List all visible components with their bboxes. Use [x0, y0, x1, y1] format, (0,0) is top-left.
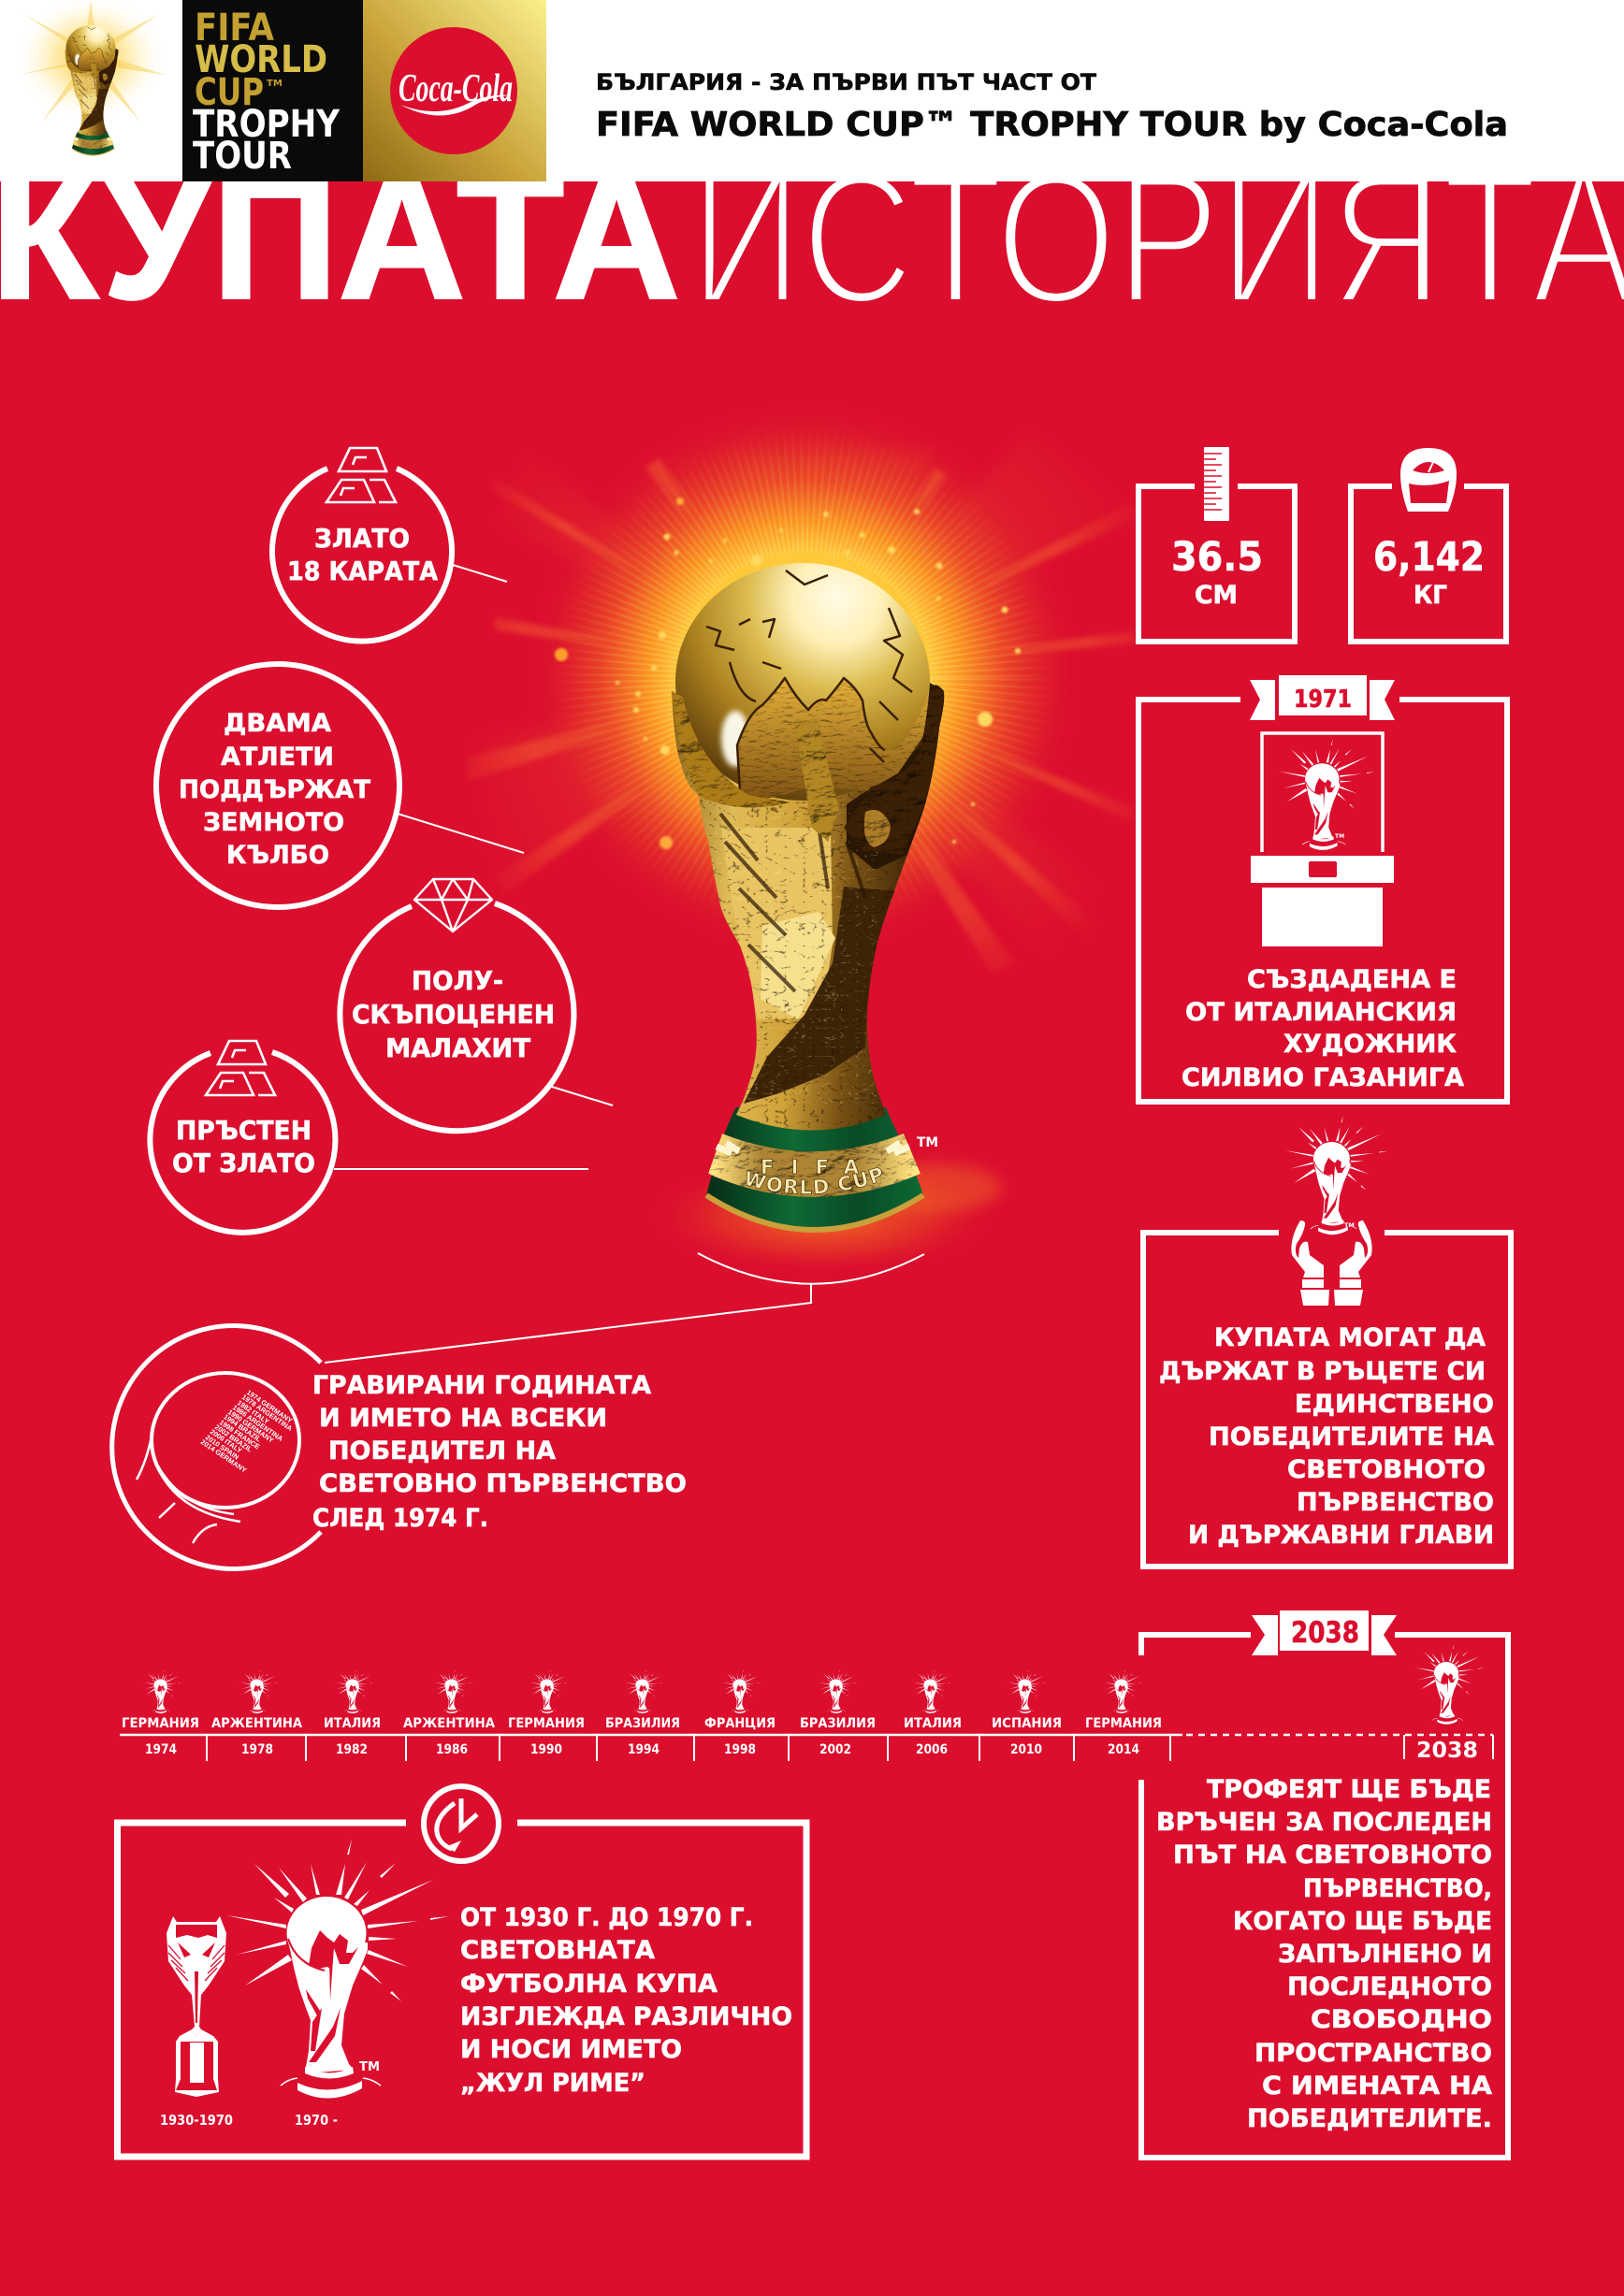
timeline years: 1974: [145, 1742, 177, 1757]
label: last presentation: ЗАПЪЛНЕНО И: [1278, 1940, 1492, 1969]
panel: 2038: [1141, 1610, 1508, 2158]
engraved winners list: 1978 ARGENTINA: [240, 1393, 295, 1433]
label: two athletes: ЗЕМНОТО: [203, 808, 344, 837]
timeline winners: ИТАЛИЯ: [324, 1716, 381, 1731]
header band: [0, 0, 1624, 181]
logo: Coca-Cola: Coca-Cola: [399, 67, 513, 110]
label: malachite: [352, 965, 555, 1063]
engraved winners list: 1974 GERMANY: [245, 1388, 294, 1425]
weight unit: КГ: [1414, 581, 1447, 610]
engraved winners list: 1982 ITALY: [236, 1398, 270, 1426]
label: two athletes: АТЛЕТИ: [221, 743, 334, 772]
logo: FIFA World Cup Trophy Tour: TM: [267, 79, 283, 89]
timeline winners: ГЕРМАНИЯ: [508, 1716, 585, 1731]
engraved winners list: 1990 GERMANY: [226, 1408, 275, 1445]
logo: FIFA World Cup Trophy Tour: CUP: [195, 71, 264, 114]
panel: 1971 creator: [1138, 675, 1507, 1102]
engraved winners list: 1998 FRANCE: [218, 1418, 261, 1451]
main title: [1, 181, 1624, 301]
label: gold 18 carat: ЗЛАТО: [314, 523, 410, 554]
icon: trophy in hands: TM: [1344, 1221, 1355, 1229]
trademark: TM: [359, 2060, 380, 2074]
label: last presentation: ПОБЕДИТЕЛИТЕ.: [1247, 2104, 1492, 2133]
engraved winners list: 2014 GERMANY: [199, 1437, 248, 1475]
label: creator: СЪЗДАДЕНА Е: [1247, 965, 1457, 994]
engraved winners list: 1994 BRAZIL: [222, 1412, 263, 1444]
label: engraved text: И ИМЕТО НА ВСЕКИ: [319, 1404, 607, 1433]
timeline winners: ГЕРМАНИЯ: [122, 1716, 199, 1731]
timeline years: 2014: [1108, 1742, 1139, 1757]
trophy base inscription: WORLD CUP: [747, 1167, 882, 1194]
engraved winners list: 2006 ITALY: [209, 1427, 243, 1455]
timeline axis: [120, 1735, 1493, 1761]
height value: 36.5: [1171, 534, 1263, 581]
trophy base inscription: FIFA: [761, 1156, 860, 1178]
trademark: TM: [917, 1135, 938, 1150]
icon: diamond: [414, 879, 492, 931]
label: engraved text: ГРАВИРАНИ ГОДИНАТА: [312, 1371, 651, 1400]
timeline years: 1994: [628, 1742, 660, 1757]
label: 1930-1970: 1930-1970: [160, 2112, 233, 2129]
timeline: [120, 1644, 1493, 1763]
callout: gold ring: [150, 1041, 588, 1233]
banner: 1971: [1250, 675, 1395, 720]
timeline winners: [122, 1716, 1162, 1731]
callout: engraved winners: [112, 1253, 924, 1569]
header title: FIFA WORLD CUP™ TROPHY TOUR by Coca-Cola: [596, 106, 1508, 144]
label: gold 18 carat: 18 КАРАТА: [287, 556, 438, 586]
timeline years: 2002: [819, 1742, 851, 1757]
label: gold ring: ПРЪСТЕН: [176, 1115, 312, 1146]
icon: base close-up: [112, 1326, 321, 1569]
label: who can hold: И ДЪРЖАВНИ ГЛАВИ: [1188, 1521, 1494, 1550]
engraved winners list: 2002 BRAZIL: [213, 1422, 254, 1454]
label: who can hold: ДЪРЖАТ В РЪЦЕТЕ СИ: [1159, 1357, 1486, 1386]
engraved winners list: 2010 SPAIN: [204, 1433, 240, 1462]
height unit: СМ: [1195, 581, 1238, 610]
timeline winners: БРАЗИЛИЯ: [800, 1716, 876, 1731]
timeline years: 2038: [1416, 1739, 1478, 1763]
timeline winners: ИТАЛИЯ: [904, 1716, 962, 1731]
label: last presentation: КОГАТО ЩЕ БЪДЕ: [1233, 1907, 1492, 1936]
icon: ruler: [1204, 447, 1229, 521]
label: Jules Rimet text: СВЕТОВНАТА: [460, 1936, 655, 1965]
icon: gold bars: [206, 1041, 275, 1095]
timeline winners: АРЖЕНТИНА: [403, 1716, 495, 1731]
label: Jules Rimet text: ОТ 1930 Г. ДО 1970 Г.: [460, 1903, 753, 1932]
label: engraved text: СВЕТОВНО ПЪРВЕНСТВО: [319, 1469, 687, 1498]
label: two athletes: [179, 709, 371, 870]
header subtitle: БЪЛГАРИЯ - ЗА ПЪРВИ ПЪТ ЧАСТ ОТ: [596, 69, 1097, 95]
label: engraved text: [312, 1371, 687, 1533]
label: who can hold: СВЕТОВНОТО: [1287, 1455, 1486, 1484]
timeline winners: ГЕРМАНИЯ: [1085, 1716, 1162, 1731]
timeline winners: ИСПАНИЯ: [992, 1716, 1062, 1731]
label: last presentation: С ИМЕНАТА НА: [1262, 2072, 1492, 2101]
label: Jules Rimet text: [460, 1903, 792, 2098]
timeline winners: БРАЗИЛИЯ: [605, 1716, 680, 1731]
banner: 2038: [1252, 1610, 1397, 1655]
logo: FIFA World Cup Trophy Tour: FIFA: [195, 7, 274, 50]
main title: КУПАТА: [0, 138, 680, 337]
icon: trophy in display case: [1251, 733, 1394, 946]
label: malachite: СКЪПОЦЕНЕН: [352, 999, 555, 1030]
icon: clock: [424, 1786, 499, 1861]
label: last presentation: СВОБОДНО: [1311, 2005, 1492, 2034]
panel: height: [1138, 447, 1295, 642]
label: who can hold: ПЪРВЕНСТВО: [1297, 1488, 1494, 1517]
icon: small trophy with glow: [14, 0, 167, 155]
icon: gold bars: [326, 448, 396, 502]
icon: trophy in hands: [1285, 1116, 1388, 1306]
label: engraved text: СЛЕД 1974 Г.: [312, 1504, 488, 1533]
timeline years: 1978: [241, 1742, 273, 1757]
timeline years: 1998: [724, 1742, 756, 1757]
panel: Jules Rimet: [118, 1786, 806, 2157]
icon: modern trophy: [226, 1840, 449, 2099]
panel: who can hold: [1143, 1116, 1511, 1567]
label: creator: ОТ ИТАЛИАНСКИЯ: [1185, 998, 1457, 1027]
label: gold 18 carat: [287, 523, 438, 586]
timeline trophies: [143, 1644, 1485, 1725]
engraved winners list: [199, 1388, 295, 1475]
logo: FIFA World Cup Trophy Tour: WORLD: [195, 38, 327, 81]
label: who can hold: КУПАТА МОГАТ ДА: [1214, 1323, 1486, 1352]
logo: Coca-Cola: [363, 0, 546, 181]
gold trophy: [655, 563, 954, 1230]
callout: gold 18 carat: [272, 448, 507, 642]
label: last presentation: ВРЪЧЕН ЗА ПОСЛЕДЕН: [1156, 1808, 1492, 1837]
label: gold ring: ОТ ЗЛАТО: [172, 1148, 315, 1178]
label: two athletes: ПОДДЪРЖАТ: [179, 775, 371, 804]
timeline years: 1986: [436, 1742, 468, 1757]
icon: scale: [1400, 448, 1457, 512]
label: 1970: 1970 -: [295, 2112, 338, 2129]
label: two athletes: КЪЛБО: [226, 841, 329, 870]
label: last presentation: ТРОФЕЯТ ЩЕ БЪДЕ: [1207, 1775, 1491, 1804]
trophy glow and rays: [468, 397, 1139, 1277]
label: creator: ХУДОЖНИК: [1283, 1030, 1457, 1059]
icon: Jules Rimet cup: [167, 1916, 226, 2097]
label: malachite: ПОЛУ-: [412, 965, 503, 996]
label: creator: СИЛВИО ГАЗАНИГА: [1182, 1063, 1464, 1092]
label: last presentation: [1156, 1775, 1492, 2133]
timeline years: 2006: [916, 1742, 948, 1757]
logo: FIFA World Cup Trophy Tour: [182, 0, 363, 181]
logo: FIFA World Cup Trophy Tour: TOUR: [193, 135, 292, 178]
label: gold ring: [172, 1115, 315, 1178]
timeline years: 2010: [1010, 1742, 1042, 1757]
callout: malachite: [340, 879, 613, 1131]
label: Jules Rimet text: ИЗГЛЕЖДА РАЗЛИЧНО: [460, 2002, 792, 2031]
panel: weight: [1351, 448, 1506, 642]
label: last presentation: ПЪТ НА СВЕТОВНОТО: [1173, 1841, 1492, 1870]
label: Jules Rimet text: И НОСИ ИМЕТО: [460, 2035, 682, 2064]
label: engraved text: ПОБЕДИТЕЛ НА: [328, 1437, 556, 1466]
banner: 1971: 1971: [1294, 686, 1352, 714]
label: last presentation: ПОСЛЕДНОТО: [1287, 1972, 1492, 2001]
icon: trophy in display case: TM: [1335, 833, 1344, 840]
label: last presentation: ПРОСТРАНСТВО: [1254, 2039, 1492, 2068]
banner: 2038: 2038: [1291, 1616, 1359, 1650]
timeline years: [145, 1739, 1478, 1763]
weight value: 6,142: [1373, 534, 1485, 581]
timeline winners: АРЖЕНТИНА: [211, 1716, 302, 1731]
label: Jules Rimet text: ФУТБОЛНА КУПА: [460, 1970, 718, 1999]
label: who can hold: ПОБЕДИТЕЛИТЕ НА: [1209, 1422, 1494, 1451]
timeline winners: ФРАНЦИЯ: [704, 1716, 776, 1731]
label: Jules Rimet text: „ЖУЛ РИМЕ”: [460, 2069, 645, 2098]
engraved winners list: 1986 ARGENTINA: [231, 1403, 285, 1443]
callout: two athletes: [156, 664, 524, 907]
trophy base inscription: [747, 1156, 882, 1194]
logo: FIFA World Cup Trophy Tour: TROPHY: [193, 103, 341, 146]
label: who can hold: [1159, 1323, 1494, 1550]
timeline years: 1982: [336, 1742, 368, 1757]
label: who can hold: ЕДИНСТВЕНО: [1295, 1390, 1494, 1419]
timeline years: 1990: [530, 1742, 562, 1757]
label: two athletes: ДВАМА: [224, 709, 331, 738]
label: last presentation: ПЪРВЕНСТВО,: [1303, 1874, 1492, 1903]
label: malachite: МАЛАХИТ: [385, 1032, 530, 1063]
label: creator: [1182, 965, 1464, 1092]
